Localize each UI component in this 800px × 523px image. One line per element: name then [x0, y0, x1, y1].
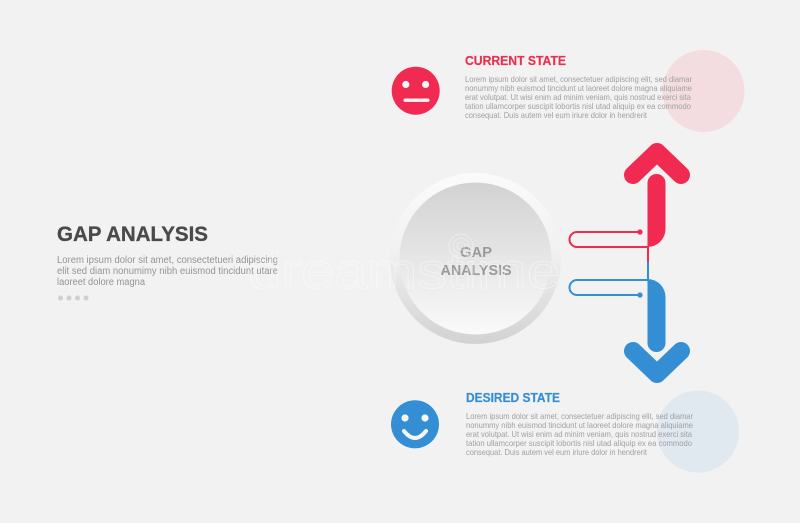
intro text block: elit sed diam nonumimy nibh euismod tincidunt utare: [57, 266, 278, 277]
text block: desired state: tation ullamcorper suscipit lobortis nisl utad aliquip ex ea commodo: [466, 438, 692, 448]
text block: current state: Lorem ipsum dolor sit amet, consectetuer adipiscing elit, sed diamar: [465, 74, 692, 84]
intro text block: Lorem ipsum dolor sit amet, consectetueri adipiscing: [57, 255, 278, 266]
arrow: down (desired state): [570, 262, 681, 374]
icon: smiling face: [391, 400, 439, 448]
decorative circle: blue: [657, 390, 739, 472]
central circle label: ANALYSIS: [440, 262, 512, 279]
text block: current state: consequat. Duis autem vel eum iriure dolor in hendrerit: [465, 110, 648, 120]
heading: desired state: DESIRED STATE: [466, 391, 560, 405]
panel: intro: [57, 223, 278, 300]
text block: current state: erat volutpat. Ut wisi enim ad minim veniam, quis nostrud exerci sita: [465, 92, 691, 102]
decorative circle: pink: [662, 50, 744, 132]
intro text block: [57, 255, 278, 288]
central circle label: [440, 244, 512, 279]
watermark: dreamstime: [248, 243, 560, 299]
arrow: up (current state): [570, 152, 681, 262]
heading: current state: CURRENT STATE: [465, 54, 566, 68]
pagination dots: [58, 296, 88, 300]
intro text block: laoreet dolore magna: [57, 277, 145, 288]
text block: desired state: erat volutpat. Ut wisi enim ad minim veniam, quis nostrud exerci sita: [466, 429, 692, 439]
text block: desired state: consequat. Duis autem vel eum iriure dolor in hendrerit: [466, 447, 648, 457]
central circle: gap analysis: [390, 173, 561, 344]
text block: current state: [465, 74, 692, 120]
text block: desired state: nonummy nibh euismod tincidunt ut laoreet dolore magna aliquiame: [466, 420, 693, 430]
text block: current state: nonummy nibh euismod tincidunt ut laoreet dolore magna aliquiame: [465, 83, 692, 93]
text block: desired state: Lorem ipsum dolor sit amet, consectetuer adipiscing elit, sed diamar: [466, 411, 693, 421]
text block: current state: tation ullamcorper suscipit lobortis nisl utad aliquip ex ea commodo: [465, 101, 691, 111]
text block: desired state: [466, 411, 693, 457]
central circle label: GAP: [460, 244, 492, 261]
panel: current state: [392, 50, 744, 132]
heading: gap analysis: GAP ANALYSIS: [57, 223, 208, 246]
panel: desired state: [391, 390, 739, 472]
icon: neutral face: [392, 67, 440, 115]
